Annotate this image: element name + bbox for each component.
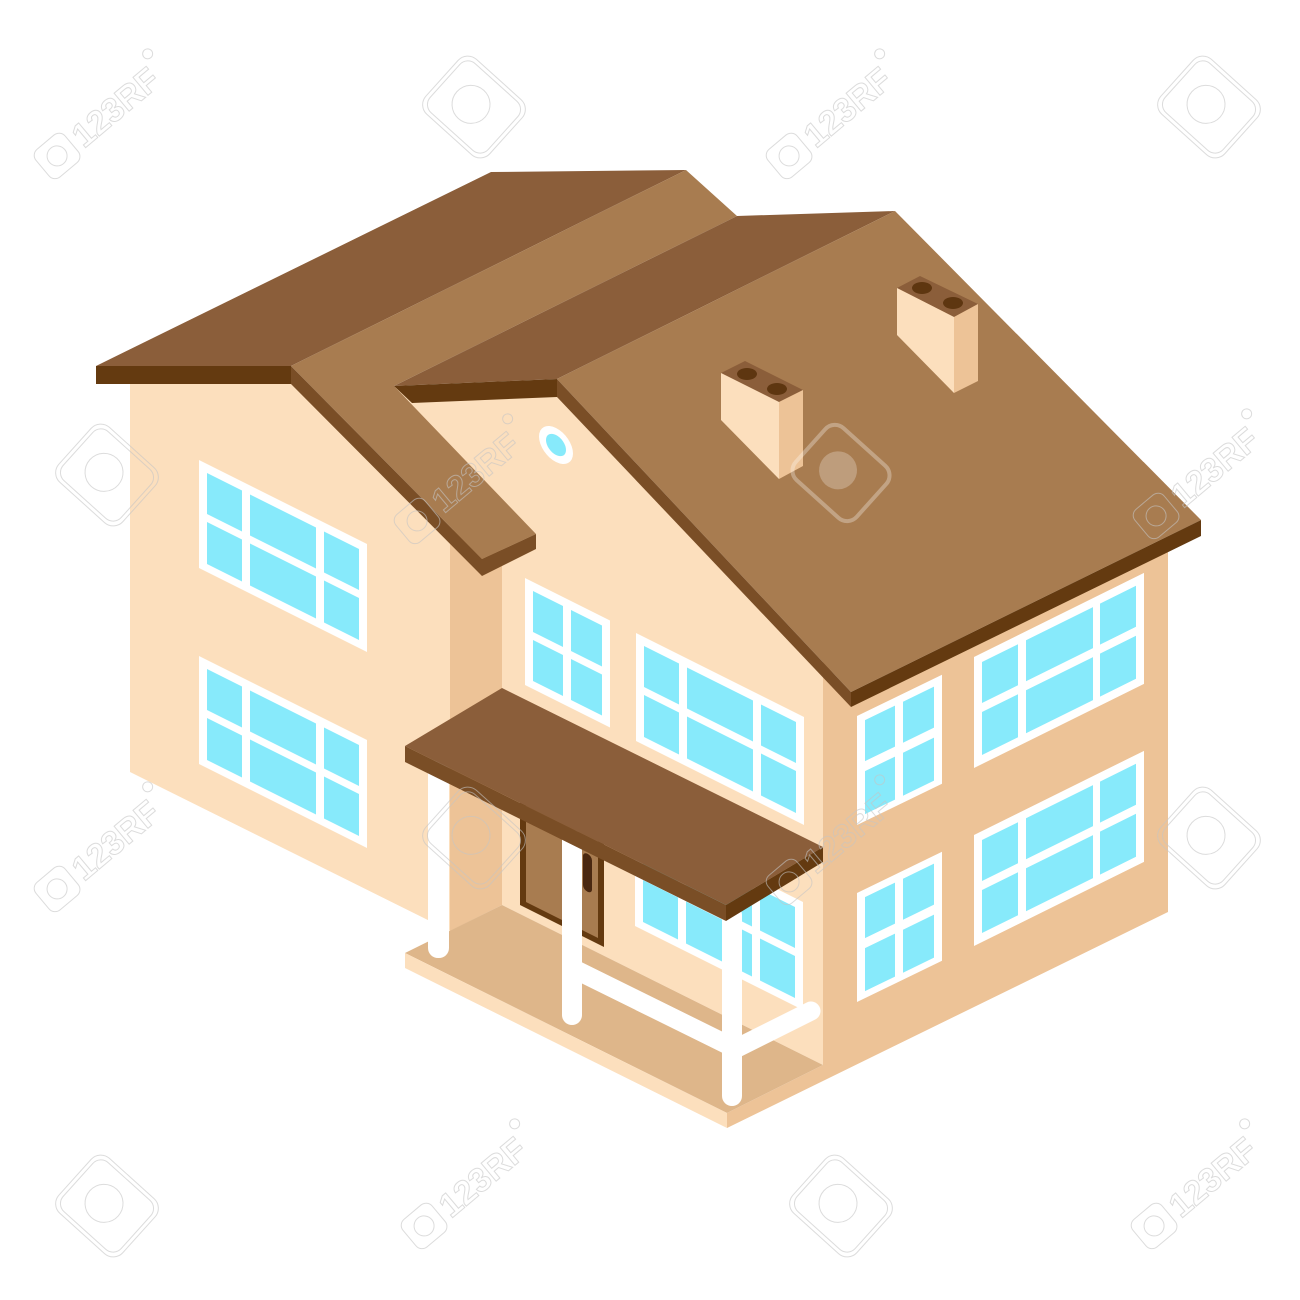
watermark 123RF bottom right	[1123, 1117, 1274, 1253]
window: front wide lower behind porch	[635, 818, 803, 1010]
front roof left edge	[557, 379, 851, 707]
watermark 123RF top right	[758, 47, 909, 183]
window: front wide upper	[636, 633, 804, 825]
porch column back	[428, 760, 449, 958]
middle front wall	[394, 382, 855, 1065]
window: right wall small lower	[857, 852, 942, 1002]
back roof	[96, 170, 737, 576]
watermark camera row 4 middle right	[784, 1150, 898, 1262]
watermark camera row 3 middle	[417, 782, 531, 894]
round attic vent	[539, 420, 573, 470]
chimney left	[721, 361, 803, 479]
watermark camera row 2 left	[50, 419, 164, 531]
recessed shaded wall	[450, 530, 502, 931]
porch column middle	[562, 830, 582, 1025]
watermark 123RF third row left: 123RF	[65, 793, 167, 888]
porch columns and railing	[428, 760, 811, 1106]
front roof eave	[394, 379, 557, 403]
watermark 123RF bottom right: 123RF	[1162, 1130, 1264, 1225]
front railing	[570, 967, 730, 1046]
watermark 123RF third row left	[26, 780, 177, 916]
chimney right	[897, 276, 978, 393]
watermark camera row 3 right	[1152, 782, 1266, 894]
watermark 123RF third row right	[758, 773, 909, 909]
watermark camera row 1 right	[1152, 51, 1266, 163]
watermark 123RF second row right	[1125, 407, 1276, 543]
back roof eave	[96, 366, 291, 384]
window: right wall wide lower	[974, 751, 1144, 946]
watermark 123RF third row right: 123RF	[797, 786, 899, 881]
window: right wall small upper	[857, 675, 942, 825]
porch platform front edge	[405, 953, 727, 1128]
watermark 123RF top left: 123RF	[65, 60, 167, 155]
porch floor	[405, 905, 823, 1113]
watermark 123RF second row middle	[386, 412, 537, 548]
porch column front	[722, 905, 742, 1106]
back roof side edge	[291, 366, 536, 576]
watermark camera on roof	[787, 420, 895, 526]
side railing	[735, 1011, 811, 1049]
watermark camera row 1 middle	[417, 51, 531, 163]
window: front small upper	[525, 578, 610, 728]
watermark 123RF top right: 123RF	[797, 60, 899, 155]
right wall and platform side	[727, 545, 1168, 1128]
watermark 123RF bottom middle: 123RF	[432, 1130, 534, 1225]
left wall	[130, 380, 450, 931]
window: left wall upper	[199, 460, 367, 652]
back roof right slope	[291, 170, 737, 559]
watermark 123RF second row right: 123RF	[1164, 420, 1266, 515]
watermark 123RF bottom middle	[393, 1117, 544, 1253]
front roof left slope	[394, 211, 895, 386]
window: left wall lower	[199, 656, 367, 848]
back roof left slope	[96, 170, 686, 366]
watermark 123RF second row middle: 123RF	[425, 425, 527, 520]
front roof main slope	[557, 211, 1201, 692]
watermark camera row 4 left	[50, 1150, 164, 1262]
watermark 123RF top left	[26, 47, 177, 183]
window: right wall wide upper	[974, 573, 1144, 768]
isometric house	[96, 170, 1201, 1128]
front roof	[394, 211, 1201, 707]
front door	[520, 780, 604, 947]
front roof lower eave	[851, 520, 1201, 707]
porch canopy	[405, 688, 823, 921]
